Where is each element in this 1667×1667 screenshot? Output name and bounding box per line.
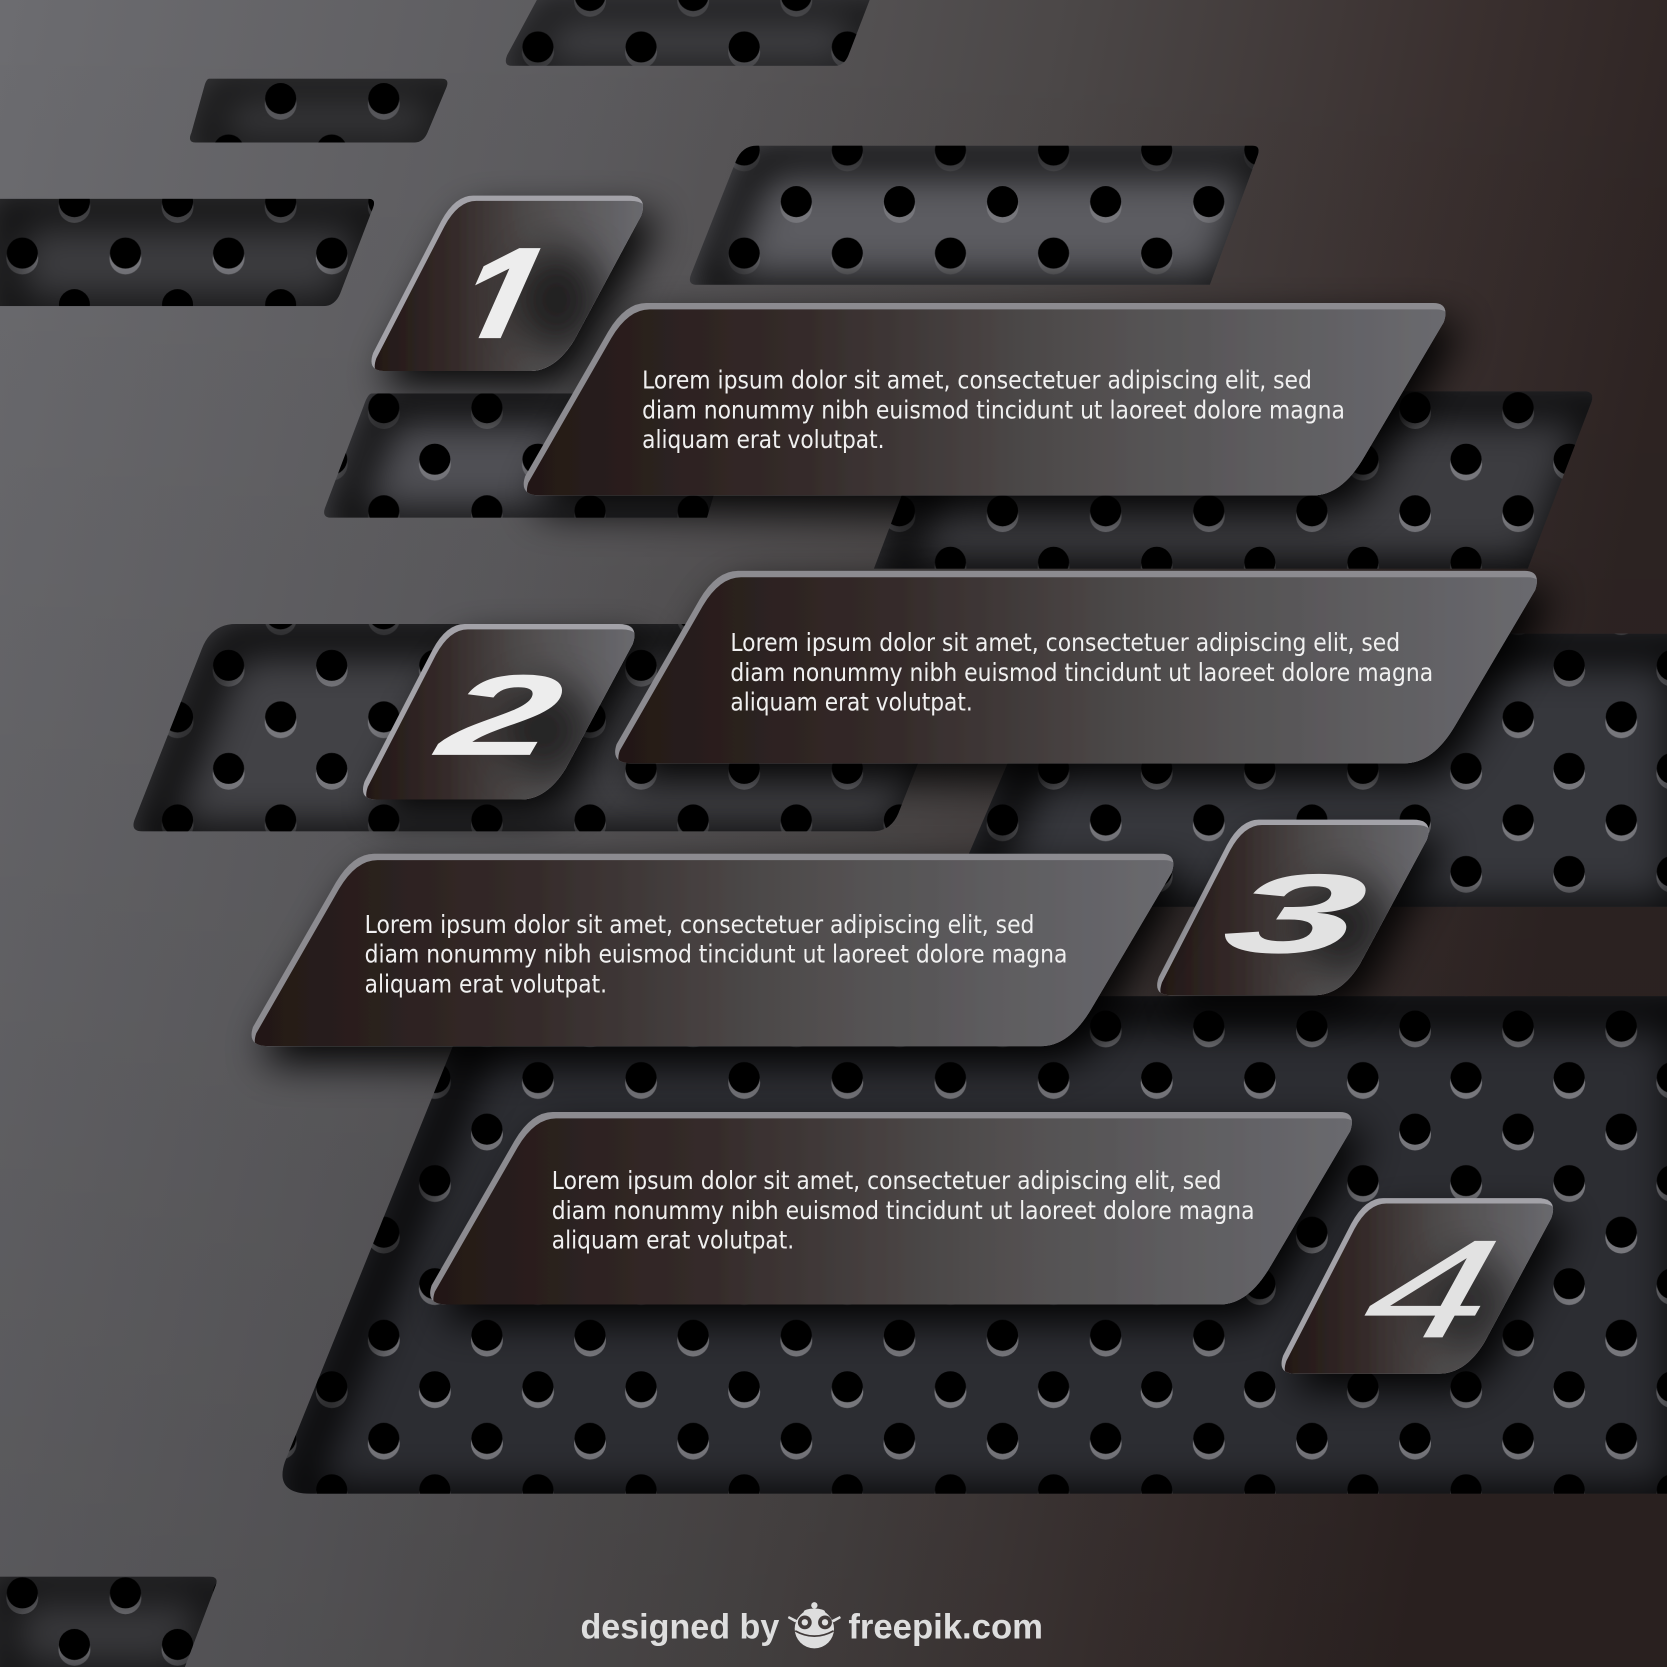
panel: bottom left perforated bbox=[0, 1571, 225, 1667]
card four text: diam nonummy nibh euismod tincidunt ut laoreet dolore magna bbox=[552, 1196, 1255, 1225]
card three text: diam nonummy nibh euismod tincidunt ut laoreet dolore magna bbox=[365, 940, 1067, 969]
panel: behind card one left bbox=[324, 393, 714, 518]
card two bbox=[615, 571, 1540, 770]
card one text: diam nonummy nibh euismod tincidunt ut laoreet dolore magna bbox=[642, 395, 1345, 424]
panel: large bottom perforated bbox=[276, 989, 1667, 1506]
card three text: aliquam erat volutpat. bbox=[365, 969, 607, 998]
card four text: Lorem ipsum dolor sit amet, consectetuer adipiscing elit, sed bbox=[552, 1166, 1222, 1195]
tile one bbox=[371, 196, 646, 394]
tile three bbox=[1157, 820, 1432, 1000]
panel: left perforated bbox=[0, 198, 374, 306]
card two text: Lorem ipsum dolor sit amet, consectetuer adipiscing elit, sed bbox=[730, 628, 1400, 657]
card one text: aliquam erat volutpat. bbox=[642, 425, 885, 454]
card one text: Lorem ipsum dolor sit amet, consectetuer adipiscing elit, sed bbox=[642, 366, 1312, 395]
card three bbox=[252, 854, 1177, 1053]
credit text: freepik.com: freepik.com bbox=[848, 1607, 1043, 1646]
card one bbox=[524, 303, 1449, 502]
number 3: 3 bbox=[1212, 851, 1378, 977]
panel: right perforated bbox=[969, 634, 1667, 907]
number 4: 4 bbox=[1350, 1211, 1513, 1367]
card four bbox=[430, 1112, 1355, 1311]
card three text: Lorem ipsum dolor sit amet, consectetuer adipiscing elit, sed bbox=[365, 910, 1034, 939]
tile four bbox=[1282, 1198, 1556, 1379]
panel: behind tile two bbox=[134, 624, 918, 832]
card four text: aliquam erat volutpat. bbox=[552, 1226, 794, 1255]
panel: small perforated bbox=[190, 78, 448, 142]
credit text: designed by: designed by bbox=[580, 1607, 780, 1646]
panel: behind card one right bbox=[874, 392, 1592, 569]
card two text: diam nonummy nibh euismod tincidunt ut laoreet dolore magna bbox=[730, 658, 1433, 687]
number 2: 2 bbox=[425, 652, 574, 780]
panel: upper right perforated bbox=[690, 146, 1258, 285]
panel: top perforated bbox=[506, 0, 870, 66]
card two text: aliquam erat volutpat. bbox=[730, 688, 973, 717]
number 1: 1 bbox=[430, 213, 566, 394]
footer credit bbox=[580, 1602, 1043, 1648]
icon: robot logo bbox=[788, 1602, 841, 1648]
tile two bbox=[363, 624, 638, 805]
